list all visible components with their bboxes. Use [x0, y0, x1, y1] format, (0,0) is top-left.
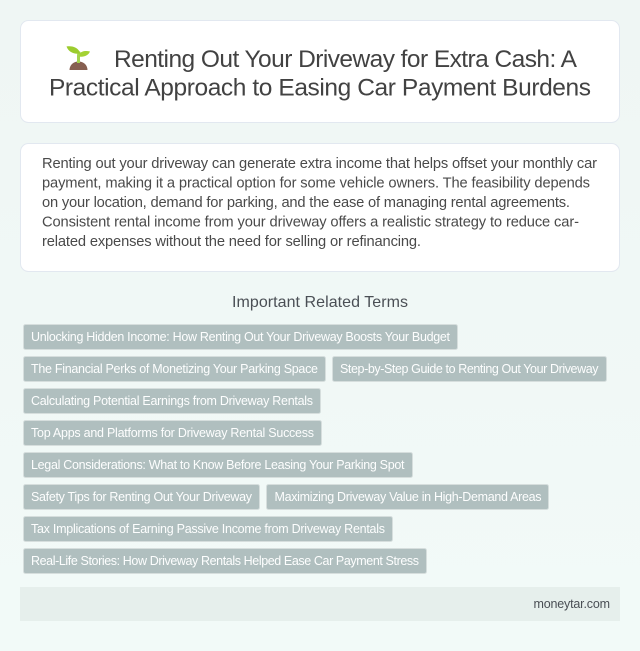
panel: intro text card: Consistent rental income from your driveway offers a realistic strategy to reduce car- — [42, 214, 579, 230]
tag: tax implications — [24, 516, 392, 542]
tag: safety tips: Safety Tips for Renting Out Your Driveway — [31, 490, 253, 504]
tag: tax implications: Tax Implications of Earning Passive Income from Driveway Rentals — [31, 522, 385, 536]
tag: financial perks — [24, 356, 326, 382]
footer bar: moneytar.com — [534, 597, 610, 611]
title: Renting Out Your Driveway for Extra Cash: A — [114, 46, 578, 73]
tag: top apps: Top Apps and Platforms for Driveway Rental Success — [31, 426, 314, 440]
panel: related term tags — [24, 324, 606, 574]
tag: unlocking hidden income: Unlocking Hidden Income: How Renting Out Your Driveway Boosts Your Budget — [31, 330, 451, 344]
panel: intro text card: related expenses without the need for selling or refinancing. — [42, 234, 421, 250]
tag: real-life stories — [24, 548, 426, 574]
tag: maximizing driveway value — [266, 484, 548, 510]
panel: intro text card: Renting out your driveway can generate extra income that helps offset your monthly car — [42, 156, 597, 172]
tag: top apps — [24, 420, 322, 446]
tag: legal considerations — [24, 452, 412, 478]
tag: safety tips — [24, 484, 260, 510]
tag: calculating earnings: Calculating Potential Earnings from Driveway Rentals — [31, 394, 313, 408]
icon: seedling — [66, 46, 90, 70]
panel: intro text card: on your location, demand for parking, and the ease of managing rental agreements. — [42, 195, 570, 211]
tag: legal considerations: Legal Considerations: What to Know Before Leasing Your Parking Spot — [31, 458, 405, 472]
tag: real-life stories: Real-Life Stories: How Driveway Rentals Helped Ease Car Payment Stress — [31, 554, 419, 568]
panel: intro text card — [20, 144, 620, 272]
panel: intro text card: payment, making it a practical option for some vehicle owners. The feasibility depends — [42, 176, 590, 192]
tag: step-by-step guide: Step-by-Step Guide to Renting Out Your Driveway — [340, 362, 599, 376]
tag: maximizing driveway value: Maximizing Driveway Value in High-Demand Areas — [274, 490, 542, 504]
heading: important related terms: Important Related Terms — [232, 294, 408, 311]
title: Practical Approach to Easing Car Payment Burdens — [49, 74, 591, 102]
tag: unlocking hidden income — [24, 324, 458, 350]
panel: title card — [20, 20, 620, 122]
footer bar — [20, 587, 620, 621]
tag: step-by-step guide — [332, 356, 606, 382]
title — [49, 46, 591, 102]
tag: calculating earnings — [24, 388, 320, 414]
tag: financial perks: The Financial Perks of Monetizing Your Parking Space — [31, 362, 318, 376]
